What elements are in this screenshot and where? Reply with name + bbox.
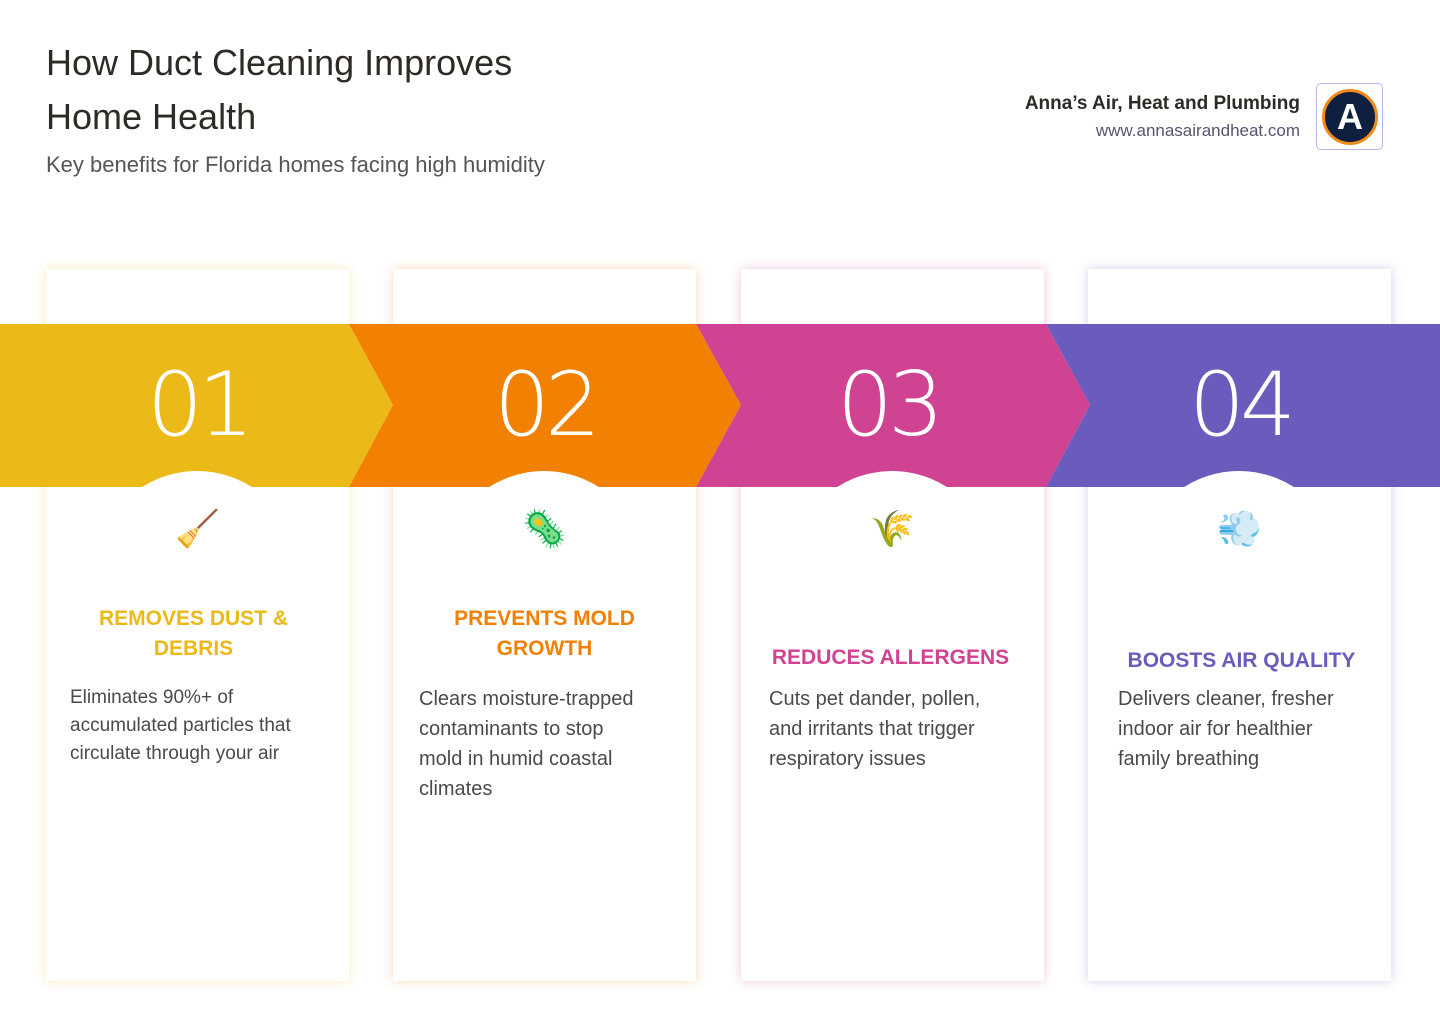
icon: microbe: 🦠 <box>522 508 567 549</box>
title: Home Health <box>46 96 256 137</box>
text 2: Clears moisture-trapped contaminants to stop mold in humid coastal climates <box>419 688 634 800</box>
text 1: Eliminates 90%+ of accumulated particles that circulate through your air <box>70 687 291 764</box>
heading 2: GROWTH <box>497 637 592 660</box>
icon: broom: 🧹 <box>175 508 220 549</box>
title <box>46 42 512 137</box>
icon: wind: 💨 <box>1217 508 1262 549</box>
number 04: 04 <box>1189 353 1291 456</box>
logo <box>1316 83 1383 150</box>
number 02: 02 <box>494 353 596 456</box>
heading 2 <box>454 607 635 660</box>
text 4: Delivers cleaner, fresher indoor air for healthier family breathing <box>1118 688 1334 770</box>
card 3 <box>741 269 1044 981</box>
card 2 <box>393 269 696 981</box>
heading 1 <box>99 607 288 660</box>
number 01: 01 <box>147 353 249 456</box>
heading 3: REDUCES ALLERGENS <box>772 646 1009 669</box>
brand text <box>1025 93 1300 140</box>
icon: rice: 🌾 <box>870 508 915 549</box>
heading 2: PREVENTS MOLD <box>454 607 635 630</box>
number 03: 03 <box>837 353 939 456</box>
heading 1: DEBRIS <box>154 637 233 660</box>
logo: A <box>1337 96 1363 137</box>
card 4 <box>1088 269 1391 981</box>
card 1 <box>46 269 349 981</box>
heading 1: REMOVES DUST & <box>99 607 288 630</box>
brand text: www.annasairandheat.com <box>1096 121 1300 140</box>
heading 4: BOOSTS AIR QUALITY <box>1128 649 1355 672</box>
arrow band <box>0 324 1440 487</box>
title: How Duct Cleaning Improves <box>46 42 512 83</box>
text 3: Cuts pet dander, pollen, and irritants that trigger respiratory issues <box>769 688 980 770</box>
subtitle: Key benefits for Florida homes facing high humidity <box>46 152 545 177</box>
brand text: Anna’s Air, Heat and Plumbing <box>1025 93 1300 114</box>
